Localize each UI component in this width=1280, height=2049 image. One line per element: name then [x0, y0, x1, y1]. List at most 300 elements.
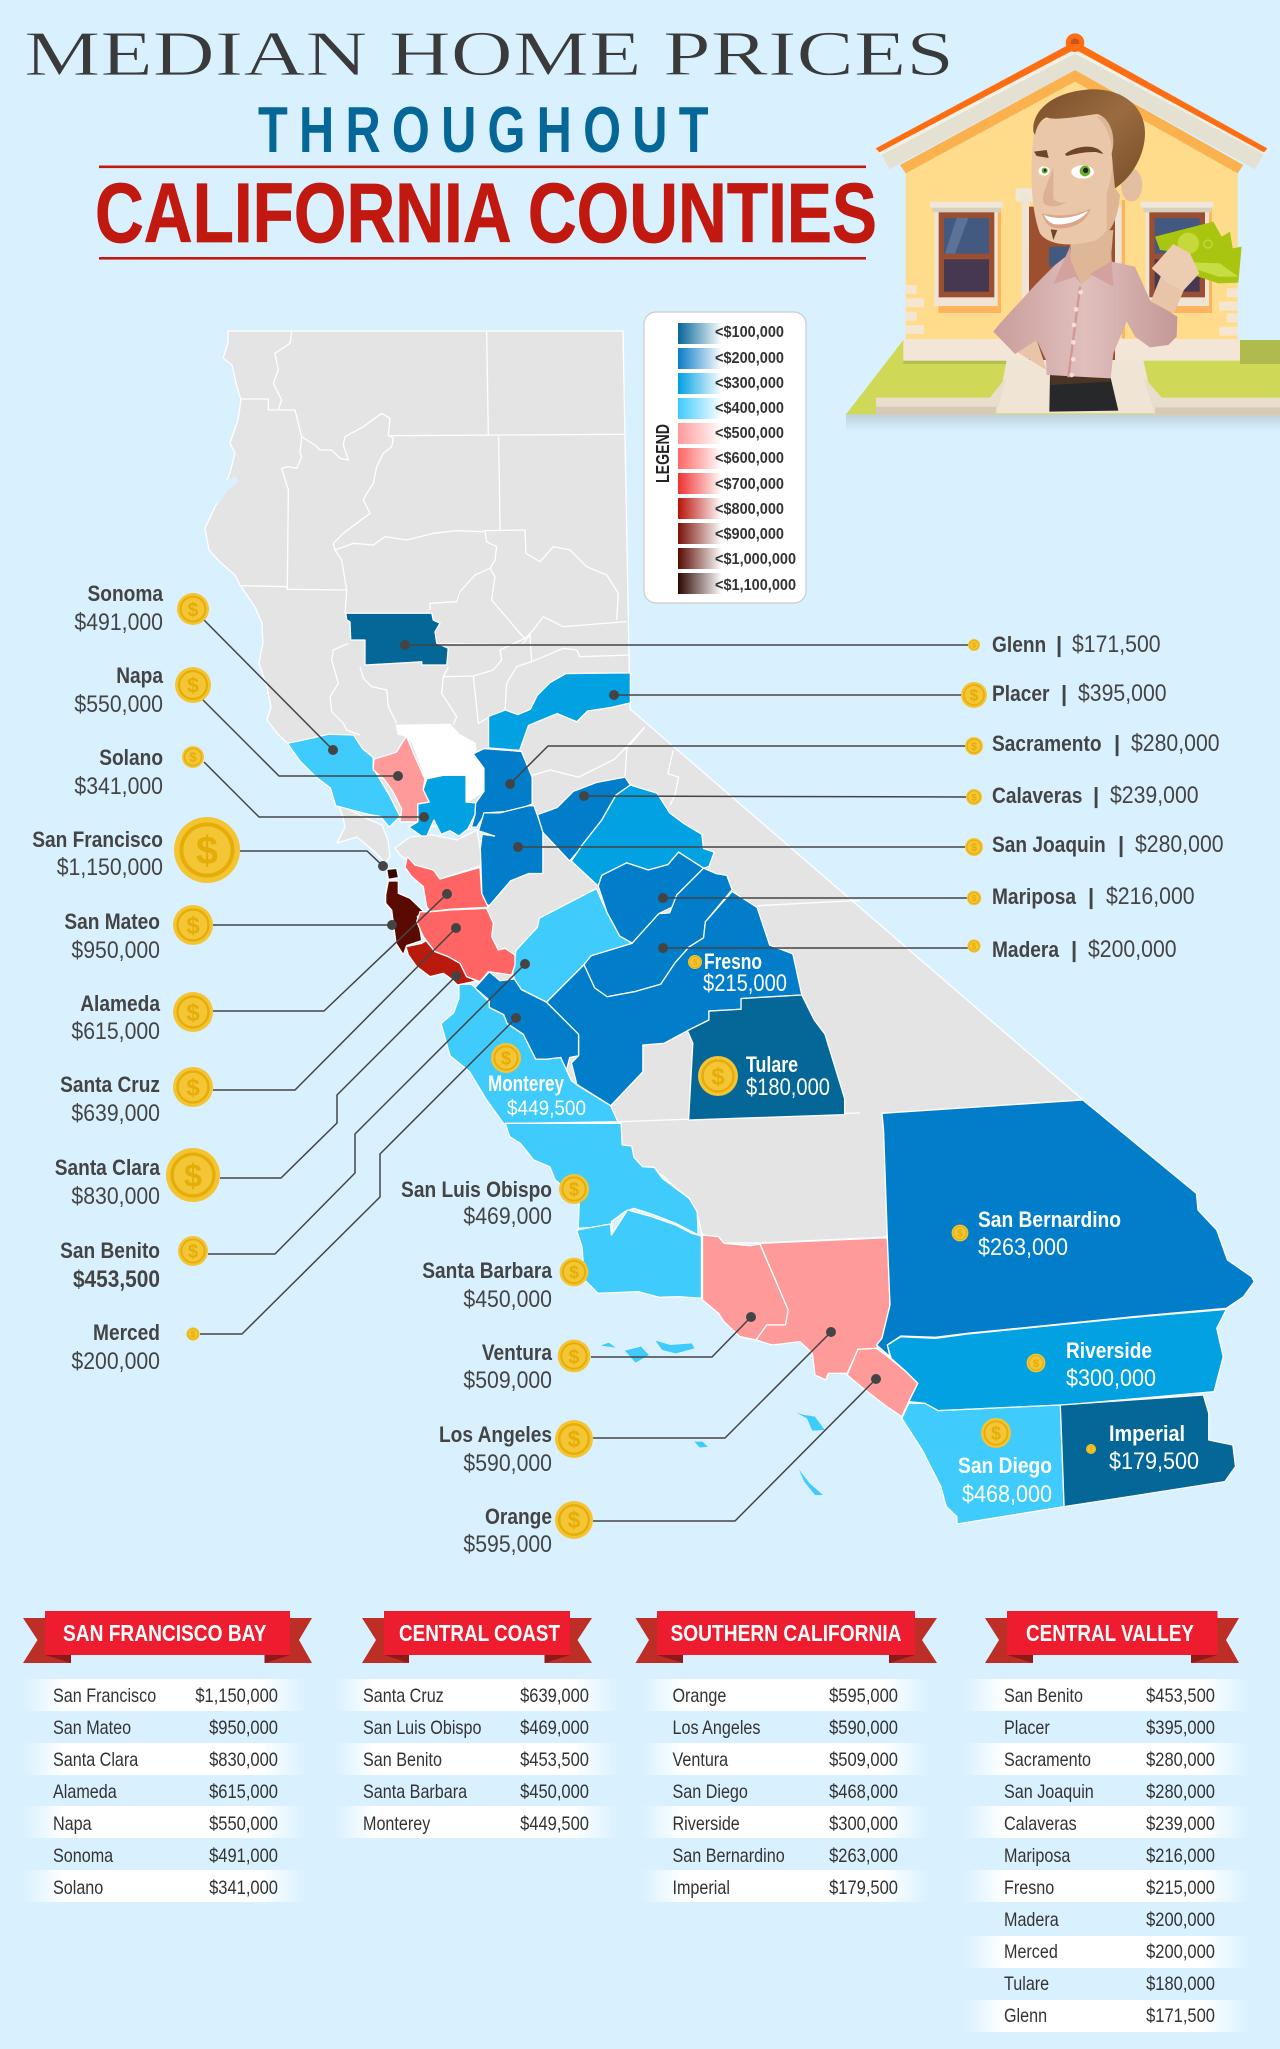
coins: $ [501, 1048, 511, 1068]
label: Santa Cruz: Santa Cruz [60, 1073, 160, 1097]
label: Glenn: | [1056, 632, 1062, 657]
label: Tulare [746, 1052, 830, 1101]
ribbon: Southern California: SOUTHERN CALIFORNIA [670, 1620, 902, 1646]
row: Madera: Madera [1004, 1909, 1059, 1930]
label: San Francisco: San Francisco [32, 828, 163, 852]
label: Santa Cruz: $639,000 [71, 1099, 160, 1126]
panel: San Francisco Bay table [23, 1611, 312, 1902]
coins: $ [569, 1179, 579, 1199]
row: San Benito: $453,500 [1146, 1685, 1215, 1706]
legend item: under 1m: <$1,000,000 [715, 551, 796, 568]
row: San Mateo: $950,000 [209, 1717, 278, 1738]
label: Sacramento: | [1114, 731, 1120, 756]
coins: $ [569, 1346, 580, 1368]
humboldt bay inlet [216, 476, 238, 505]
coins: $ [568, 1507, 581, 1533]
row: Santa Barbara: Santa Barbara [363, 1781, 467, 1802]
row: San Joaquin [1004, 1781, 1215, 1802]
row: Solano: Solano [53, 1877, 103, 1898]
county: Mariposa [598, 852, 704, 943]
row: Santa Clara: Santa Clara [53, 1749, 138, 1770]
label: San Luis Obispo: San Luis Obispo [401, 1178, 552, 1202]
row: Tulare: $180,000 [1146, 1973, 1215, 1994]
label: Santa Barbara: $450,000 [463, 1285, 552, 1312]
row: San Mateo: San Mateo [53, 1717, 131, 1738]
label: Solano [74, 746, 163, 799]
row: Santa Clara: $830,000 [209, 1749, 278, 1770]
coins: $ [187, 673, 199, 698]
row: Tulare [1004, 1973, 1215, 1994]
panel: Central Coast table [335, 1611, 618, 1838]
ribbon: Central Valley [985, 1611, 1239, 1663]
label: Tulare: $180,000 [746, 1074, 830, 1101]
label: Mariposa: | [1088, 884, 1094, 909]
legend item: under 400k [678, 398, 784, 419]
central counties [288, 613, 845, 1124]
legend item: under 1.1m [678, 573, 796, 594]
man: nose [1043, 167, 1067, 206]
labels: left column [32, 582, 163, 1374]
county borders: north [240, 332, 630, 735]
label: Merced: Merced [93, 1321, 160, 1345]
coins: $ [189, 750, 197, 765]
row: Mariposa: $216,000 [1146, 1845, 1215, 1866]
label: Napa: $550,000 [74, 690, 163, 717]
label: San Mateo [64, 910, 160, 963]
ribbon: Southern California [636, 1611, 937, 1663]
label: Orange: $595,000 [463, 1530, 552, 1557]
title line: throughout: THROUGHOUT [258, 94, 720, 167]
row: Fresno [1004, 1877, 1215, 1898]
labels inside map [488, 949, 1199, 1508]
legend title: LEGEND [653, 424, 673, 483]
row: Placer: $395,000 [1146, 1717, 1215, 1738]
label: Imperial: $179,500 [1109, 1448, 1199, 1475]
row: San Joaquin: San Joaquin [1004, 1781, 1094, 1802]
label: Placer [992, 679, 1167, 706]
legend item: under 1m [678, 548, 796, 569]
label: Placer: $395,000 [1078, 679, 1167, 706]
label: Riverside [1066, 1338, 1156, 1392]
legend item: under 800k: <$800,000 [715, 501, 784, 518]
label: Tulare: Tulare [746, 1052, 798, 1077]
county: San Joaquin [479, 806, 543, 906]
label: Santa Barbara: Santa Barbara [422, 1259, 552, 1283]
label: Sacramento [992, 729, 1220, 756]
row: Placer: Placer [1004, 1717, 1050, 1738]
row: Sacramento: Sacramento [1004, 1749, 1091, 1770]
county: San Francisco [387, 868, 400, 879]
county: Tuolumne [571, 785, 714, 886]
coins: $ [184, 1157, 202, 1193]
row: San Benito: $453,500 [520, 1749, 589, 1770]
legend item: under 200k: <$200,000 [715, 350, 784, 367]
man: collar [1053, 247, 1081, 284]
brick details [906, 285, 1238, 336]
county: Orange [847, 1348, 918, 1417]
row: Mariposa [1004, 1845, 1215, 1866]
label: Fresno [703, 949, 787, 997]
title [24, 19, 954, 260]
legend item: under 100k: <$100,000 [715, 324, 784, 341]
row: Sonoma: Sonoma [53, 1845, 113, 1866]
man: mouth [1042, 209, 1091, 228]
row: Monterey: $449,500 [520, 1813, 589, 1834]
row: Sonoma [53, 1845, 278, 1866]
label: Napa [74, 664, 163, 717]
panel: Central Valley table [964, 1611, 1248, 2032]
label: Sonoma: $491,000 [74, 608, 163, 635]
legend item: under 600k [678, 448, 784, 469]
man: belt [1050, 376, 1111, 385]
label: Monterey [488, 1071, 586, 1120]
coins: $ [972, 893, 977, 903]
row: Sacramento [1004, 1749, 1215, 1770]
coins: $ [971, 792, 977, 803]
row: Merced [1004, 1941, 1215, 1962]
man: hand [1152, 244, 1199, 291]
row bands [964, 1679, 1248, 2032]
label: Sacramento: Sacramento [992, 732, 1102, 756]
county: Placer [489, 673, 630, 750]
county: Merced [512, 889, 632, 1002]
county: Monterey [441, 984, 618, 1124]
county: Alameda [405, 857, 488, 912]
title line: california counties: CALIFORNIA COUNTIES [95, 166, 877, 260]
label: Sonoma [74, 582, 163, 635]
row: Fresno: $215,000 [1146, 1877, 1215, 1898]
row: Riverside: Riverside [672, 1813, 740, 1834]
label: Calaveras: $239,000 [1110, 781, 1199, 808]
label: Riverside: Riverside [1066, 1338, 1152, 1363]
man: face [1031, 110, 1120, 244]
coins: $ [1033, 1358, 1040, 1370]
row: San Bernardino: $263,000 [829, 1845, 898, 1866]
coins: $ [693, 957, 698, 967]
row: San Francisco: San Francisco [53, 1685, 156, 1706]
label: Madera [992, 935, 1177, 962]
row: Calaveras: $239,000 [1146, 1813, 1215, 1834]
row: San Benito: San Benito [1004, 1685, 1083, 1706]
map base: gray counties [205, 331, 1083, 1243]
label: Madera: $200,000 [1088, 935, 1177, 962]
row: Imperial [672, 1877, 898, 1898]
row: Monterey [363, 1813, 589, 1834]
row: San Benito [363, 1749, 589, 1770]
row: Imperial: $179,500 [829, 1877, 898, 1898]
county: Napa [373, 736, 429, 822]
coins: $ [196, 829, 218, 873]
label: San Joaquin: San Joaquin [992, 833, 1106, 857]
county: Solano [409, 775, 476, 836]
row: Alameda: Alameda [53, 1781, 117, 1802]
labels: center column [401, 1178, 552, 1557]
coins: $ [191, 1330, 196, 1339]
county: Yolo [396, 724, 484, 802]
label: Calaveras: Calaveras [992, 784, 1082, 808]
label: Mariposa [992, 882, 1195, 909]
man: trousers [1049, 375, 1118, 412]
label: Merced [71, 1321, 160, 1374]
rule above [99, 166, 866, 168]
row: Glenn: $171,500 [1146, 2005, 1215, 2026]
row: San Luis Obispo: San Luis Obispo [363, 1717, 482, 1738]
county borders: east [532, 727, 860, 1122]
row: Solano: $341,000 [209, 1877, 278, 1898]
label: Glenn [992, 630, 1161, 657]
man: goatee [1051, 229, 1057, 240]
label: San Benito: San Benito [60, 1239, 160, 1263]
coins: $ [568, 1426, 581, 1452]
label: Alameda: $615,000 [71, 1017, 160, 1044]
row: Solano [53, 1877, 278, 1898]
money [1155, 222, 1242, 283]
man: hand on hip [1017, 340, 1047, 370]
label: Santa Clara: Santa Clara [55, 1156, 160, 1180]
row: Madera: $200,000 [1146, 1909, 1215, 1930]
label: Alameda: Alameda [80, 992, 160, 1016]
coins: $ [569, 1262, 579, 1282]
row: Napa [53, 1813, 278, 1834]
label: Glenn: Glenn [992, 633, 1046, 657]
county: San Benito [475, 972, 579, 1072]
row bands [24, 1679, 306, 1902]
row: Calaveras [1004, 1813, 1215, 1834]
label: San Luis Obispo [401, 1178, 552, 1229]
man: eyebrows [1034, 147, 1103, 158]
row: Glenn [1004, 2005, 1215, 2026]
label: San Diego [958, 1453, 1052, 1508]
label: Ventura: $509,000 [463, 1366, 552, 1393]
coins: $ [1089, 1447, 1093, 1453]
legend item: under 400k: <$400,000 [715, 400, 784, 417]
legend item: under 900k: <$900,000 [715, 526, 784, 543]
legend box [644, 312, 806, 603]
coins: $ [957, 1229, 963, 1240]
panel: Southern California table [636, 1611, 937, 1902]
row: Sonoma: $491,000 [209, 1845, 278, 1866]
label: San Benito: $453,500 [73, 1266, 160, 1292]
label: San Bernardino [978, 1207, 1121, 1261]
right window [1141, 202, 1213, 313]
label: Merced: $200,000 [71, 1347, 160, 1374]
label: San Joaquin: $280,000 [1135, 830, 1224, 857]
man: neck [1070, 230, 1113, 285]
row: Sacramento: $280,000 [1146, 1749, 1215, 1770]
row: Santa Cruz [363, 1685, 589, 1706]
label: Santa Barbara [422, 1259, 552, 1312]
coins: $ [970, 688, 979, 705]
county: San Mateo [386, 881, 424, 955]
map of California [205, 331, 1254, 1524]
row: Merced: Merced [1004, 1941, 1058, 1962]
label: Orange [463, 1505, 552, 1557]
county: Santa Barbara [577, 1210, 701, 1298]
coins: $ [991, 1423, 1001, 1443]
county: Sacramento [471, 749, 532, 827]
legend item: under 300k: <$300,000 [715, 375, 784, 392]
row: Merced: $200,000 [1146, 1941, 1215, 1962]
row: San Diego: San Diego [672, 1781, 748, 1802]
row: San Joaquin: $280,000 [1146, 1781, 1215, 1802]
row: San Benito [1004, 1685, 1215, 1706]
label: Riverside: $300,000 [1066, 1365, 1156, 1392]
label: Calaveras [992, 781, 1199, 808]
row: Fresno: Fresno [1004, 1877, 1054, 1898]
ribbon: Central Coast: CENTRAL COAST [399, 1620, 560, 1646]
label: San Joaquin [992, 830, 1224, 857]
county: Sonoma [288, 734, 400, 827]
county: Calaveras [537, 777, 630, 861]
label: Los Angeles: Los Angeles [439, 1423, 552, 1447]
coins: $ [188, 600, 199, 621]
county: Riverside [887, 1309, 1226, 1411]
row: Ventura [672, 1749, 898, 1770]
label: San Bernardino: $263,000 [978, 1234, 1068, 1261]
county: Fresno [546, 891, 802, 1106]
coins: $ [971, 842, 977, 854]
row bands [335, 1679, 618, 1838]
label: Fresno: Fresno [704, 949, 762, 974]
county: San Diego [902, 1403, 1064, 1524]
leader lines and dots [200, 620, 968, 1521]
bay area counties [386, 857, 515, 985]
label: Los Angeles [439, 1423, 552, 1476]
row: Ventura: Ventura [672, 1749, 728, 1770]
label: Placer: | [1061, 681, 1067, 706]
legend item: under 600k: <$600,000 [715, 450, 784, 467]
label: Glenn: $171,500 [1072, 630, 1161, 657]
legend [644, 312, 806, 603]
label: Madera: Madera [992, 938, 1059, 962]
row: Riverside [672, 1813, 898, 1834]
coins: $ [971, 741, 977, 753]
row: San Bernardino: San Bernardino [672, 1845, 785, 1866]
row: Santa Barbara [363, 1781, 589, 1802]
label: San Diego: $468,000 [962, 1481, 1052, 1508]
row: Napa: $550,000 [209, 1813, 278, 1834]
label: Mariposa: $216,000 [1106, 882, 1195, 909]
label: Los Angeles: $590,000 [463, 1449, 552, 1476]
channel islands [601, 1341, 825, 1495]
man: hair [1033, 89, 1145, 188]
coins: $ [711, 1064, 725, 1090]
illustration: house with man holding money [846, 33, 1280, 432]
man: shirt [993, 250, 1177, 378]
label: Monterey: Monterey [488, 1071, 565, 1096]
label: Madera: | [1071, 937, 1077, 962]
door [1016, 188, 1125, 360]
label: Orange: Orange [485, 1505, 552, 1529]
label: Placer: Placer [992, 682, 1049, 706]
county: Ventura [702, 1235, 788, 1340]
label: San Mateo: $950,000 [71, 936, 160, 963]
label: Santa Clara [55, 1156, 160, 1209]
row: Santa Barbara: $450,000 [520, 1781, 589, 1802]
row: Madera [1004, 1909, 1215, 1930]
row: San Francisco: $1,150,000 [195, 1685, 278, 1706]
row: Monterey: Monterey [363, 1813, 430, 1834]
labels: right column [992, 630, 1224, 962]
southern counties [505, 1100, 1254, 1524]
man: shirt placket and buttons [1068, 287, 1083, 377]
legend item: under 500k [678, 423, 784, 444]
map base: Contra Costa [395, 830, 483, 879]
row: San Luis Obispo [363, 1717, 589, 1738]
row: Placer [1004, 1717, 1215, 1738]
coins: $ [188, 1241, 198, 1261]
label: San Benito [60, 1239, 160, 1292]
label: Alameda [71, 992, 160, 1044]
county: Madera [584, 868, 732, 997]
row: Orange [672, 1685, 898, 1706]
row: Ventura: $509,000 [829, 1749, 898, 1770]
legend item: under 800k [678, 498, 784, 519]
row: Glenn: Glenn [1004, 2005, 1047, 2026]
map base: Marin [337, 803, 390, 863]
county: Santa Clara [417, 908, 515, 982]
row: Imperial: Imperial [672, 1877, 730, 1898]
label: Ventura [463, 1341, 552, 1393]
man: ear [1121, 168, 1142, 202]
legend item: under 700k [678, 473, 784, 494]
legend item: under 900k [678, 523, 784, 544]
title line: median home prices: MEDIAN HOME PRICES [24, 19, 954, 89]
label: Imperial: Imperial [1109, 1421, 1185, 1446]
county: Los Angeles [756, 1238, 890, 1380]
row: San Benito: San Benito [363, 1749, 442, 1770]
county: Tulare [687, 995, 845, 1120]
label: Ventura: Ventura [482, 1341, 552, 1365]
row: Santa Cruz: $639,000 [520, 1685, 589, 1706]
label: Santa Cruz [60, 1073, 160, 1126]
row: Tulare: Tulare [1004, 1973, 1049, 1994]
ribbon: San Francisco Bay [23, 1611, 312, 1663]
ribbon: Central Coast [362, 1611, 592, 1663]
row: Orange: Orange [672, 1685, 727, 1706]
row: Los Angeles: $590,000 [829, 1717, 898, 1738]
label: San Francisco [32, 828, 163, 880]
coins: $ [972, 942, 977, 951]
coins: $ [186, 1074, 200, 1102]
label: Monterey: $449,500 [507, 1097, 586, 1120]
label: Sonoma: Sonoma [88, 582, 163, 606]
row: San Luis Obispo: $469,000 [520, 1717, 589, 1738]
label: San Bernardino: San Bernardino [978, 1207, 1121, 1232]
county: Imperial [1060, 1395, 1236, 1507]
label: San Joaquin: | [1118, 832, 1124, 857]
row: San Mateo [53, 1717, 278, 1738]
label: Santa Clara: $830,000 [71, 1182, 160, 1209]
label: Calaveras: | [1093, 783, 1099, 808]
row: Los Angeles [672, 1717, 898, 1738]
row: Santa Clara [53, 1749, 278, 1770]
man: eyes [1038, 165, 1094, 179]
label: Mariposa: Mariposa [992, 885, 1076, 909]
label: Fresno: $215,000 [703, 970, 787, 997]
legend item: under 200k [678, 348, 784, 369]
row: San Diego: $468,000 [829, 1781, 898, 1802]
row: Santa Cruz: Santa Cruz [363, 1685, 444, 1706]
left window [930, 202, 1003, 313]
rule below [99, 257, 866, 260]
row: Calaveras: Calaveras [1004, 1813, 1077, 1834]
coins [166, 593, 1096, 1539]
legend item: under 100k [678, 323, 784, 344]
label: Solano: Solano [99, 746, 163, 770]
label: Sacramento: $280,000 [1131, 729, 1220, 756]
label: Imperial [1109, 1421, 1199, 1475]
